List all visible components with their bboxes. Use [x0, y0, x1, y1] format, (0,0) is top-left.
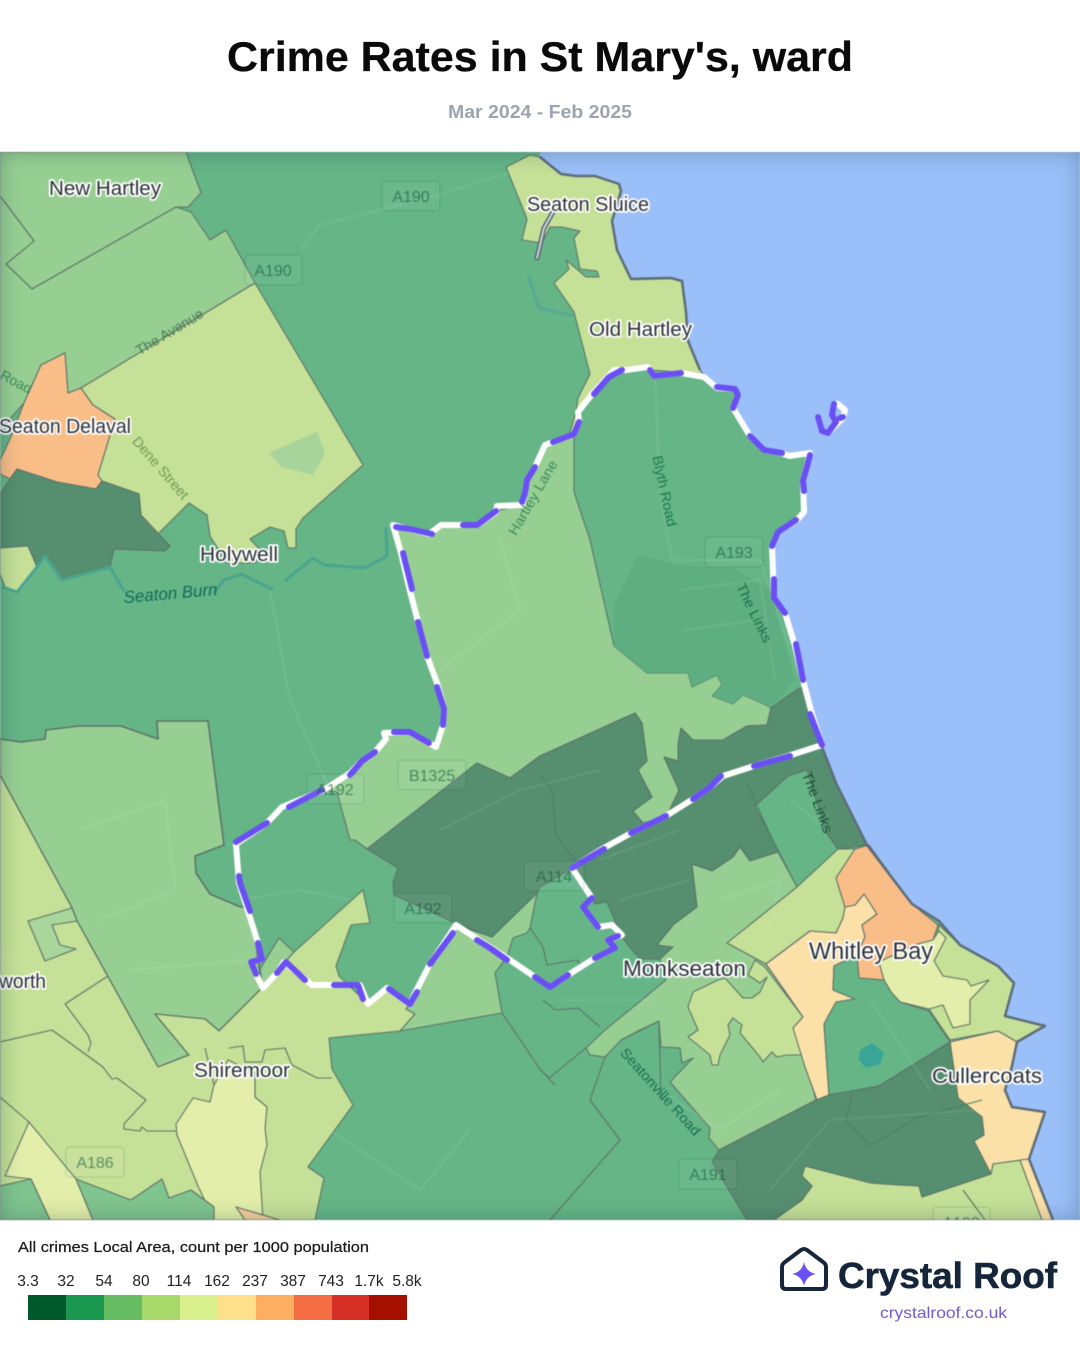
header	[227, 33, 853, 122]
rivers	[3, 212, 571, 592]
boundary purple dashes	[236, 370, 843, 1004]
legend scale numbers: 743	[318, 1273, 344, 1290]
shield: A186	[66, 1147, 124, 1177]
area: Whitley Bay pale	[879, 931, 989, 1028]
place: Seaton Delaval: Seaton Delaval	[0, 416, 131, 438]
icon: purple star	[792, 1262, 816, 1286]
legend scale numbers: 387	[280, 1273, 306, 1290]
map edge vignette	[0, 152, 1080, 1220]
area: A186 pale	[5, 1122, 93, 1220]
shield: B1325	[398, 760, 466, 790]
road shields	[66, 181, 990, 1237]
area: Cullercoats cream	[950, 1031, 1045, 1174]
area: yellow green Monkseaton	[688, 960, 807, 1065]
sea	[540, 152, 1080, 1220]
shield: A192 south	[394, 893, 452, 923]
icon: house outline	[782, 1249, 826, 1289]
road label: The Links south: The Links	[799, 769, 836, 835]
shield: A192 north: A192	[316, 782, 354, 799]
logo: Crystal Roof	[782, 1249, 1058, 1322]
area: Whitley Bay cream	[766, 894, 877, 1100]
boundary white casing	[236, 367, 822, 1004]
legend scale numbers: 5.8k	[392, 1273, 422, 1290]
area: Shiremoor yellow green	[0, 775, 415, 1220]
area: Seaton Delaval dark	[0, 469, 170, 580]
lake	[859, 1043, 884, 1068]
shield: A190 east	[382, 181, 440, 211]
area: central dark band	[367, 687, 867, 959]
title: Crime Rates in St Mary's, ward	[227, 33, 853, 80]
area: ward west light green	[324, 434, 771, 849]
boundary islet	[818, 404, 845, 433]
road label: Seatonville Road: Seatonville Road	[617, 1045, 704, 1139]
area: The Avenue north	[0, 196, 255, 430]
area: New Hartley	[0, 152, 201, 289]
pond	[269, 432, 325, 475]
place: Backworth fragment: worth	[0, 971, 46, 993]
place: Cullercoats: Cullercoats	[932, 1065, 1042, 1088]
road label: Blyth Road: Blyth Road	[650, 454, 680, 528]
shield: A192 south: A192	[404, 901, 442, 918]
place: Shiremoor: Shiremoor	[194, 1060, 290, 1082]
place labels	[0, 178, 1042, 1088]
road label: The Avenue: The Avenue	[133, 305, 206, 358]
faint street network	[0, 170, 980, 1190]
area: yellow green east	[727, 849, 855, 964]
area: west light green patch	[28, 908, 77, 961]
area: ward slightly darker patch	[614, 555, 795, 708]
road labels	[0, 305, 836, 1139]
logo wordmark: Crystal Roof	[838, 1255, 1058, 1296]
road label: The Links north: The Links	[733, 581, 776, 645]
place: Whitley Bay: Whitley Bay	[809, 938, 933, 965]
legend scale numbers: 3.3	[17, 1273, 39, 1290]
road label: Hartley Lane: Hartley Lane	[505, 457, 561, 538]
place: Holywell: Holywell	[200, 544, 278, 566]
place: Seaton Sluice: Seaton Sluice	[527, 194, 649, 216]
shield: A191: A191	[689, 1167, 727, 1184]
place: New Hartley: New Hartley	[49, 178, 161, 200]
ward boundary: St Mary's	[236, 367, 845, 1004]
legend title: All crimes Local Area, count per 1000 population	[18, 1239, 369, 1256]
legend scale numbers: 114	[167, 1273, 192, 1290]
road label: Dene Street: Dene Street	[129, 433, 192, 502]
shield: A192 bottom	[933, 1207, 990, 1237]
area: A192 light green	[400, 893, 537, 1031]
legend	[17, 1239, 422, 1320]
area: Whitley Bay orange	[836, 845, 938, 980]
shield: A186: A186	[76, 1155, 114, 1172]
shield: A190 west	[245, 255, 302, 285]
area: bottom coast cream	[1020, 1159, 1053, 1220]
area: orange corner	[236, 1207, 280, 1220]
shield: A192 north	[307, 774, 364, 804]
area: Seaton Sluice and Old Hartley	[506, 155, 705, 436]
legend scale numbers: 32	[57, 1273, 75, 1290]
area: Cullercoats dark	[712, 1042, 991, 1220]
area: mid green by The Links	[755, 770, 838, 887]
shield: A193: A193	[715, 545, 753, 562]
coastline south	[822, 747, 1053, 1220]
area: light green Monkseaton east	[586, 847, 816, 1150]
base land: mid green	[0, 152, 1080, 1220]
map panel	[0, 151, 1080, 1221]
area: small light green wedge	[260, 938, 294, 988]
coastline	[540, 157, 700, 370]
shield: B1325: B1325	[409, 768, 455, 785]
shield: A114	[524, 861, 584, 891]
subtitle: date range: Mar 2024 - Feb 2025	[448, 102, 632, 122]
boundary lines	[0, 775, 985, 1220]
area: southwest light green block	[0, 721, 262, 1067]
shield: A190 west: A190	[254, 263, 292, 280]
area: east of Dene Street	[81, 283, 363, 563]
legend scale numbers: 162	[204, 1273, 230, 1290]
area: bottom yellow green	[774, 1159, 1053, 1220]
choropleth areas	[0, 152, 1053, 1220]
place: Monkseaton: Monkseaton	[623, 956, 746, 981]
shield: A190 east: A190	[392, 189, 430, 206]
shield: A191	[679, 1159, 737, 1189]
place: Old Hartley: Old Hartley	[589, 319, 692, 341]
legend scale numbers: 80	[132, 1273, 150, 1290]
legend scale numbers: 237	[242, 1273, 268, 1290]
footer	[17, 1239, 1058, 1322]
area: Whitley Bay park green	[824, 955, 950, 1095]
area: Whitley Bay coast green	[929, 925, 1045, 1042]
shield: A193	[705, 537, 763, 567]
shield: A114: A114	[536, 869, 572, 886]
area: Shiremoor pale	[176, 1060, 267, 1220]
area: south-west green	[76, 1179, 214, 1220]
area: south-west corner green	[0, 1179, 50, 1220]
website link: crystalroof.co.uk	[880, 1305, 1008, 1322]
area: small southwest yellow	[0, 546, 37, 592]
legend scale numbers	[17, 1273, 422, 1290]
water label: Seaton Burn: Seaton Burn	[123, 580, 218, 607]
legend colour bar	[28, 1295, 407, 1320]
legend scale numbers: 54	[95, 1273, 113, 1290]
legend scale numbers: 1.7k	[354, 1273, 384, 1290]
area: Seaton Delaval south	[0, 353, 115, 489]
